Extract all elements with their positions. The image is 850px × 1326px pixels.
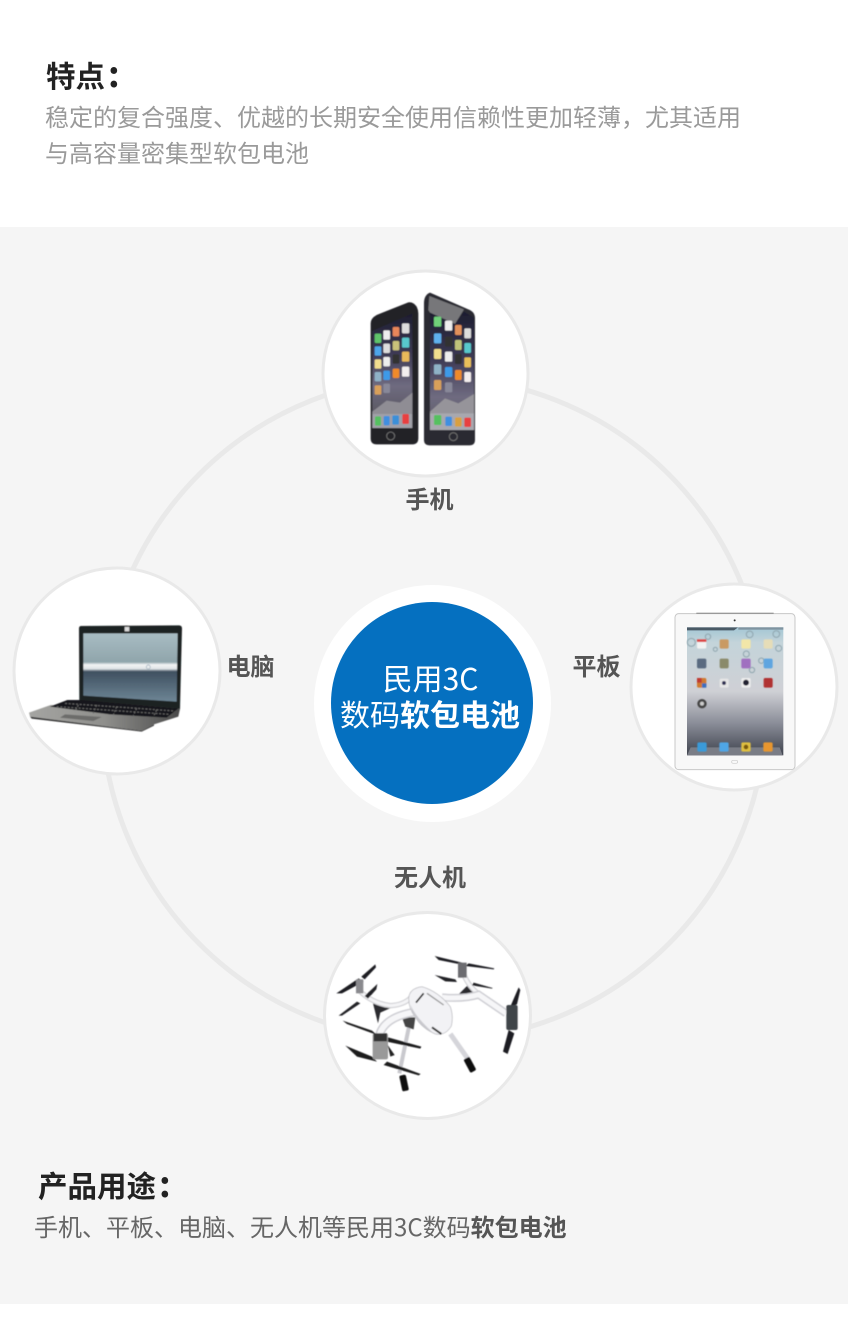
text block: features description: 与高容量密集型软包电池 xyxy=(45,134,309,169)
label: phone: 手机 xyxy=(406,480,454,515)
label: drone: 无人机 xyxy=(394,858,466,893)
center badge: 民用3C xyxy=(383,655,478,699)
arms xyxy=(372,999,394,1023)
heading: features: 特点: xyxy=(46,46,120,98)
text block: product uses description: 手机、平板、电脑、无人机等民用3C数码软包电池 xyxy=(34,1208,567,1243)
label: tablet: 平板 xyxy=(572,647,620,682)
center badge: 数码软包电池 xyxy=(340,691,520,735)
device: phones xyxy=(323,271,528,476)
propellers xyxy=(336,964,376,993)
right phone xyxy=(424,293,475,445)
device: laptop xyxy=(14,568,220,774)
center badge xyxy=(314,585,551,822)
heading: product uses: 产品用途: xyxy=(38,1156,171,1208)
landing legs xyxy=(399,1025,409,1073)
text block: features description xyxy=(45,98,741,169)
device: tablet xyxy=(631,584,837,790)
text block: features description: 稳定的复合强度、优越的长期安全使用信赖性更加轻薄，尤其适用 xyxy=(45,98,741,133)
big ring connecting devices xyxy=(102,377,766,1041)
label: computer: 电脑 xyxy=(226,647,274,682)
device: drone xyxy=(324,912,530,1118)
left phone xyxy=(371,302,418,444)
body xyxy=(409,987,452,1034)
